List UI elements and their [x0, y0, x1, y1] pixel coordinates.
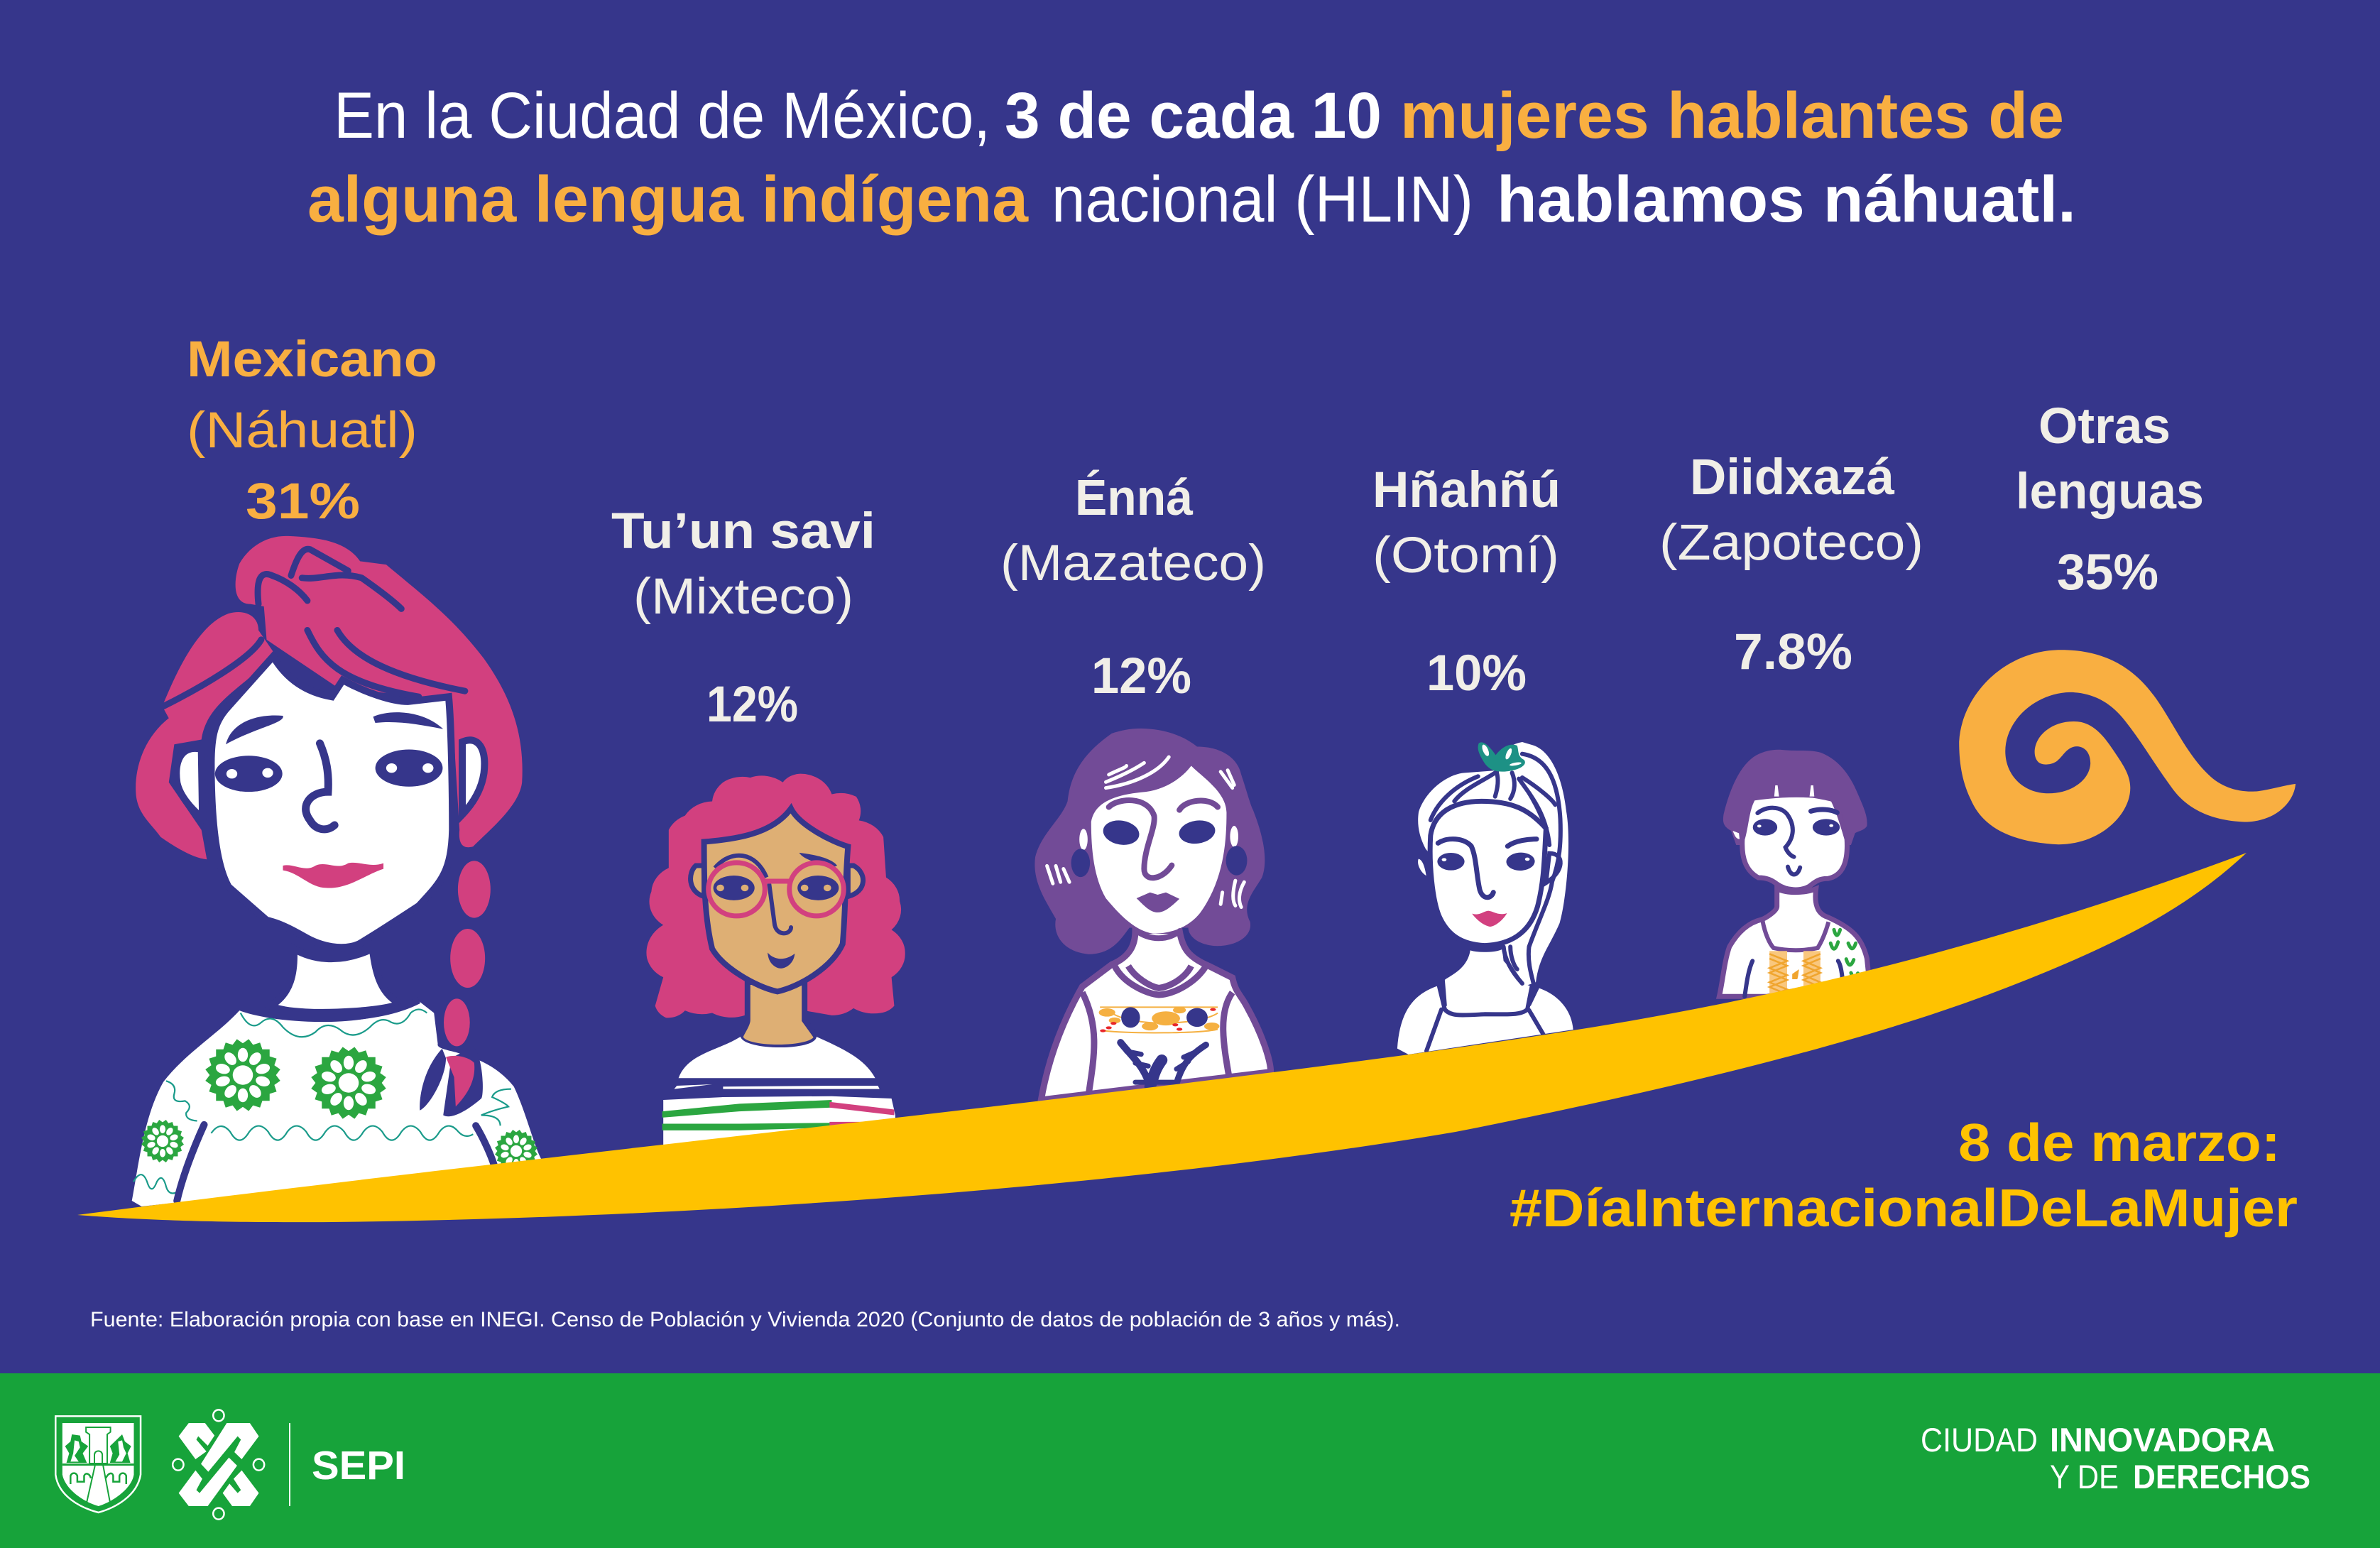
label: Mexicano 31%: 31% — [246, 474, 360, 530]
label: Tu'un savi 12% — [611, 503, 875, 733]
icon: orange swirl for Otras lenguas — [1959, 650, 2296, 844]
illustration: woman Diidxazá — [1719, 750, 1869, 996]
label: Mexicano 31% — [187, 332, 437, 530]
callout: 8 de marzo hashtag: #DíaInternacionalDeLaMujer — [1510, 1178, 2298, 1238]
illustration: woman Mexicano — [132, 536, 544, 1206]
title: En la Ciudad de México, — [334, 80, 990, 152]
logo: CDMX X mark — [173, 1410, 264, 1520]
label: Otras lenguas 35%: 35% — [2057, 545, 2158, 601]
label: Énná 12%: (Mazateco) — [1000, 535, 1266, 592]
label: Énná 12%: Énná — [1075, 470, 1193, 526]
illustration: woman Hñahñú — [1397, 742, 1573, 1054]
title: 3 de cada 10 — [1005, 80, 1382, 152]
slogan: INNOVADORA — [2050, 1421, 2275, 1459]
label: Otras lenguas 35% — [2016, 398, 2204, 601]
label: Hñahñú 10%: Hñahñú — [1372, 462, 1561, 518]
label: Diidxazá 7.8%: 7.8% — [1734, 624, 1852, 680]
title: mujeres hablantes de — [1400, 80, 2064, 152]
callout: 8 de marzo hashtag — [1510, 1113, 2298, 1238]
title: hablamos náhuatl. — [1497, 163, 2076, 236]
footer band — [0, 1373, 2380, 1548]
illustration: woman Énná — [1035, 729, 1271, 1100]
label: Otras lenguas 35%: lenguas — [2016, 464, 2204, 520]
slogan: DERECHOS — [2133, 1458, 2310, 1495]
title: alguna lengua indígena — [307, 163, 1029, 236]
title — [307, 80, 2076, 236]
label: Tu'un savi 12%: (Mixteco) — [633, 569, 853, 625]
label: Énná 12% — [1000, 470, 1266, 704]
label: Hñahñú 10%: 10% — [1426, 645, 1527, 702]
label: Diidxazá 7.8%: (Zapoteco) — [1659, 515, 1923, 571]
yellow curved band — [77, 853, 2247, 1222]
label: Mexicano 31%: Mexicano — [187, 332, 437, 388]
label: Tu'un savi 12%: 12% — [706, 677, 798, 733]
source note: Fuente: Elaboración propia con base en INEGI. Censo de Población y Vivienda 2020 (Conjunto de datos de población de 3 años y más). — [90, 1308, 1400, 1331]
label: Énná 12%: 12% — [1091, 648, 1191, 704]
label: Diidxazá 7.8% — [1659, 449, 1923, 680]
illustration: woman Tu'un savi — [646, 774, 905, 1146]
label: Otras lenguas 35%: Otras — [2038, 398, 2171, 454]
slogan — [1921, 1421, 2310, 1495]
slogan: Y DE — [2050, 1458, 2119, 1495]
title: nacional (HLIN) — [1052, 163, 1473, 236]
logo: shield — [55, 1416, 141, 1512]
slogan: CIUDAD — [1921, 1421, 2038, 1459]
label: Tu'un savi 12%: Tu’un savi — [611, 503, 875, 560]
label: Hñahñú 10%: (Otomí) — [1372, 528, 1559, 584]
label: Hñahñú 10% — [1372, 462, 1561, 702]
callout: 8 de marzo hashtag: 8 de marzo: — [1958, 1113, 2281, 1172]
logo divider and SEPI: SEPI — [312, 1443, 405, 1488]
label: Diidxazá 7.8%: Diidxazá — [1690, 449, 1895, 506]
label: Mexicano 31%: (Náhuatl) — [187, 403, 417, 459]
